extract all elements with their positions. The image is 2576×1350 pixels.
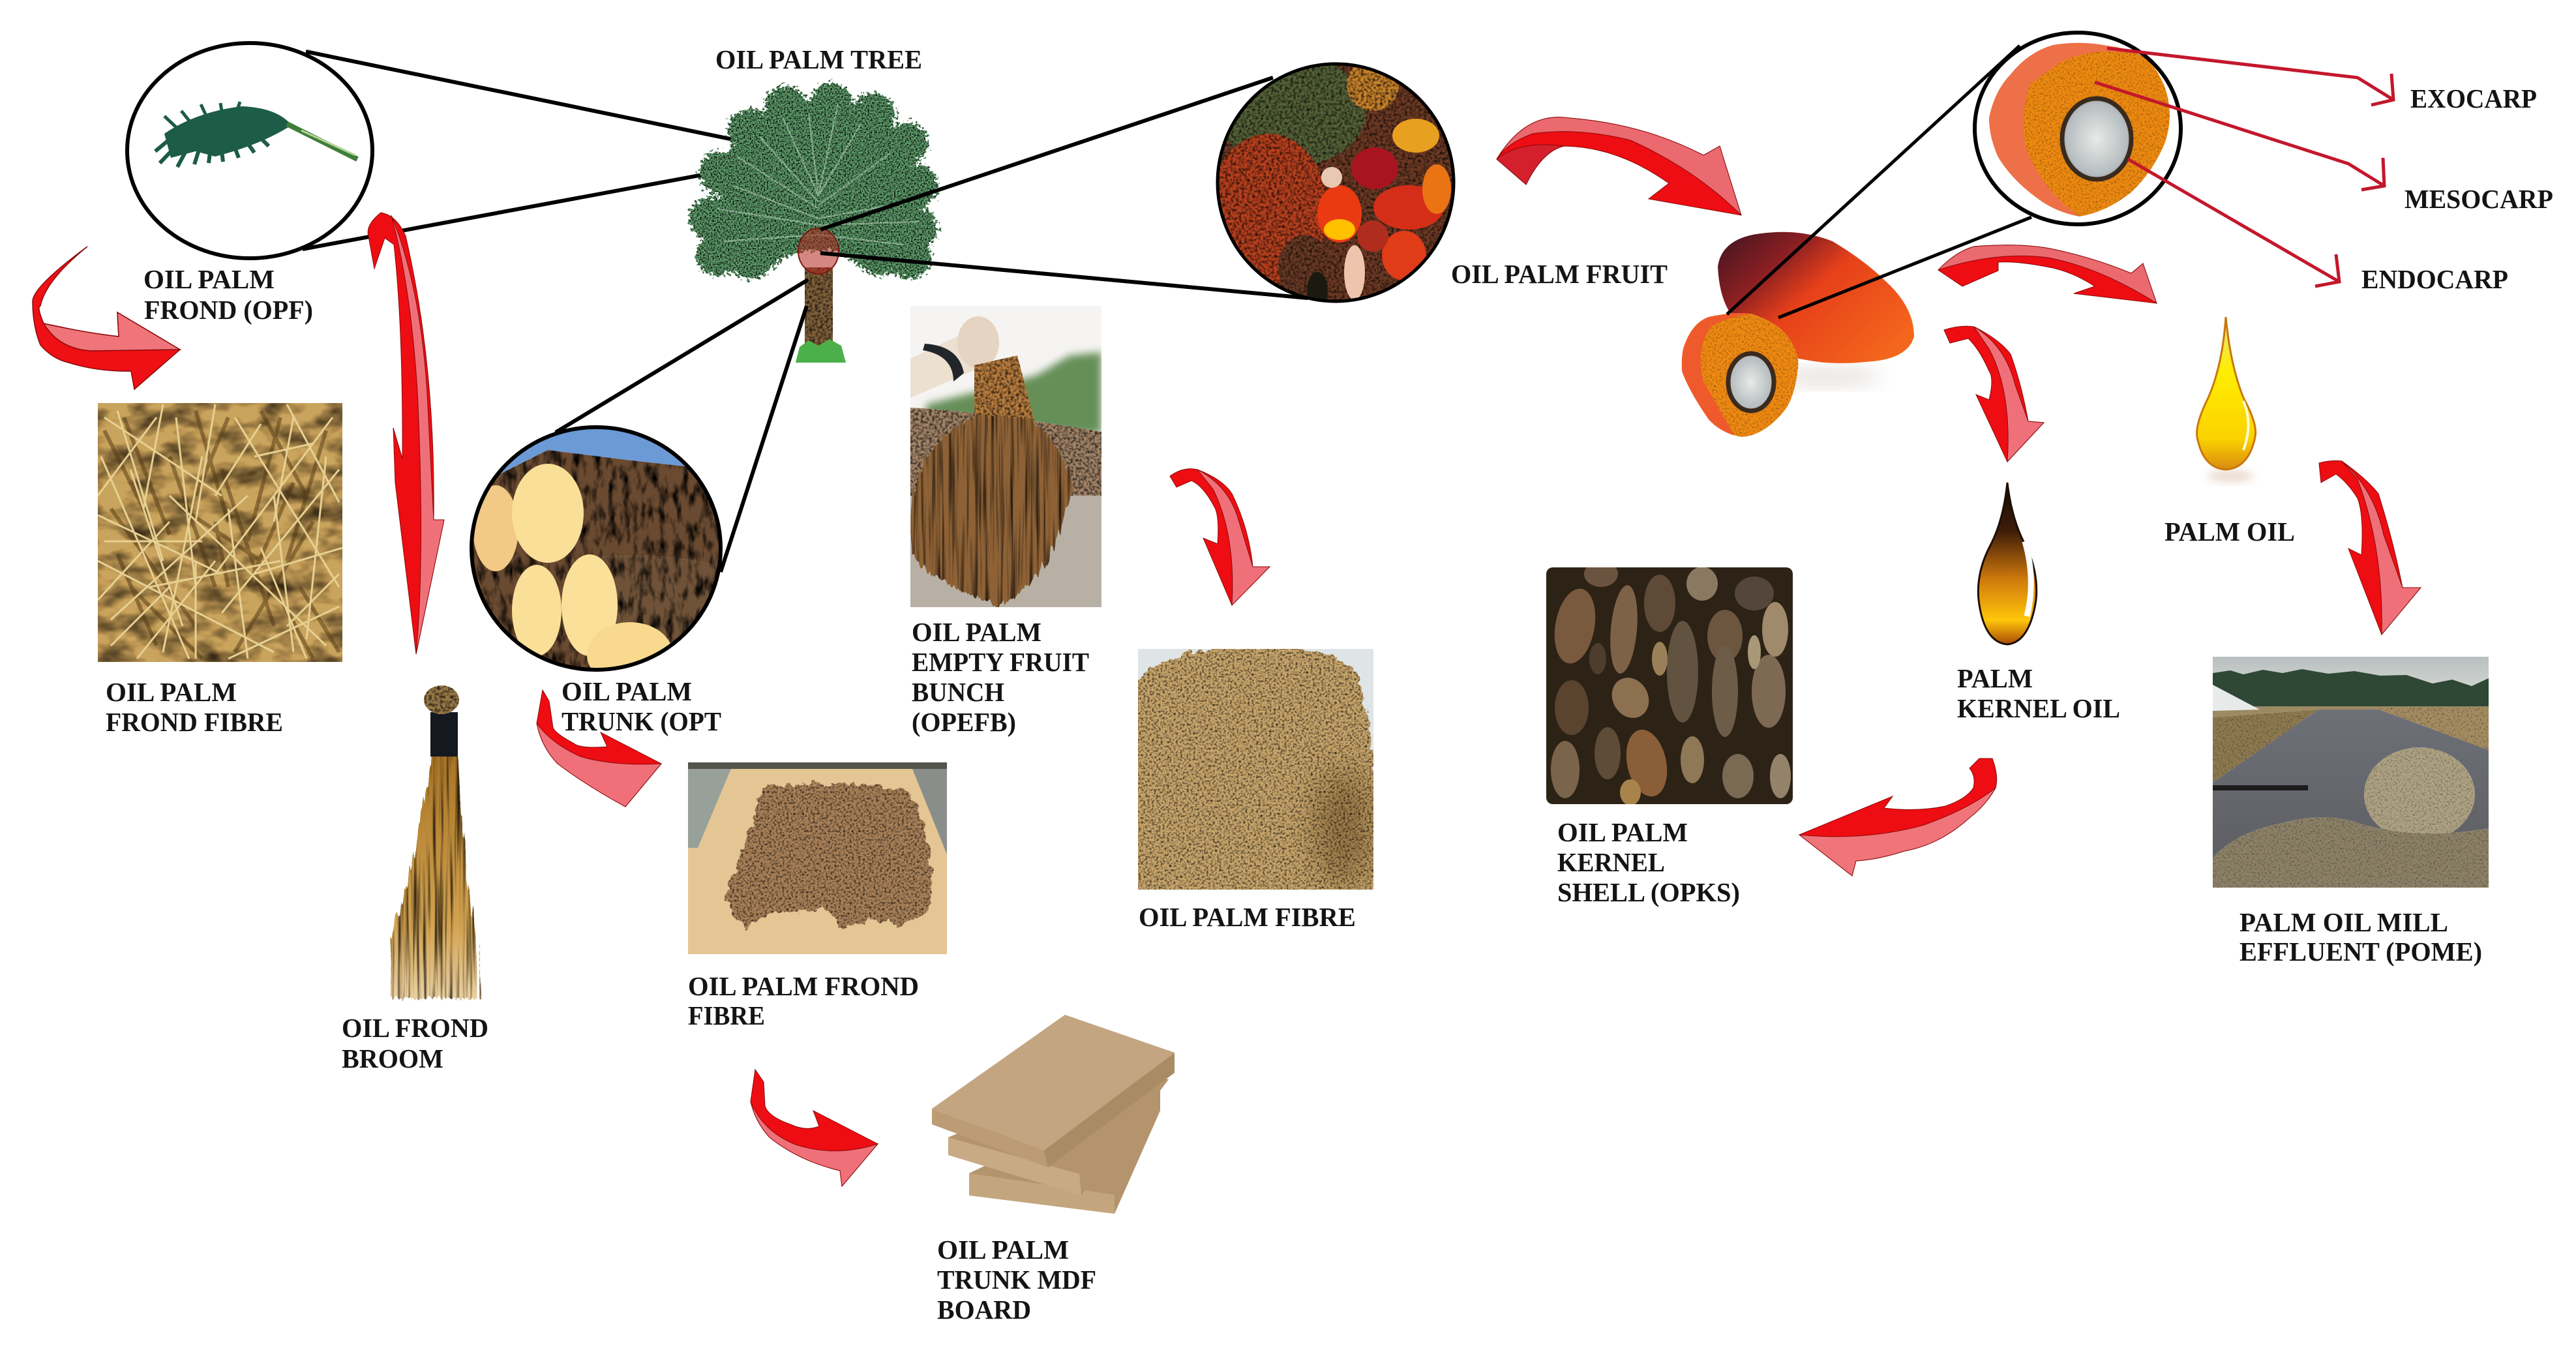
dark strands bbox=[104, 411, 339, 659]
label: frond fibre mat bbox=[688, 971, 919, 1030]
label: palm kernel oil: KERNEL OIL bbox=[1957, 693, 2120, 723]
label: palm oil: PALM OIL bbox=[2164, 517, 2295, 547]
fibre bunch bbox=[910, 415, 1075, 605]
panel: oil palm frond fibre mat photo bbox=[688, 762, 947, 954]
label: oil frond broom: BROOM bbox=[342, 1043, 443, 1073]
stalk bbox=[974, 355, 1037, 430]
arrow: to endocarp bbox=[2128, 159, 2339, 286]
label: exocarp: EXOCARP bbox=[2410, 83, 2537, 113]
arrow: palm oil to effluent bbox=[2319, 460, 2421, 635]
label: frond fibre mat: FIBRE bbox=[688, 1000, 765, 1030]
circle outline bbox=[472, 427, 721, 670]
green trees bbox=[926, 352, 1101, 434]
label: empty fruit bunch: OIL PALM bbox=[912, 617, 1041, 647]
label: oil palm frond fibre bbox=[106, 677, 283, 737]
tree trunk bbox=[805, 267, 833, 347]
base bbox=[2213, 657, 2489, 888]
circle outline bbox=[1975, 33, 2181, 224]
panel: oil palm kernel shell photo bbox=[1546, 561, 1793, 805]
label: empty fruit bunch bbox=[912, 617, 1089, 737]
panel: palm oil mill effluent photo bbox=[2213, 657, 2489, 888]
left bank bbox=[2213, 710, 2318, 783]
icon: palm broom bbox=[390, 685, 479, 999]
label: trunk MDF board: TRUNK MDF bbox=[937, 1265, 1096, 1295]
label: palm kernel oil bbox=[1957, 663, 2120, 723]
drop highlight bbox=[2243, 401, 2249, 450]
hand bbox=[957, 316, 999, 368]
light strands bbox=[98, 404, 342, 659]
far ground bbox=[2213, 706, 2489, 726]
icon: whole and cut palm fruits bbox=[1682, 232, 1914, 437]
dark top edge bbox=[688, 762, 947, 769]
label: empty fruit bunch: BUNCH bbox=[912, 677, 1004, 707]
broom bristles bbox=[390, 753, 479, 999]
label: oil palm frond fibre: FROND FIBRE bbox=[106, 707, 283, 737]
label: trunk MDF board: OIL PALM bbox=[937, 1235, 1069, 1265]
arrow: empty fruit bunch to fibre bbox=[1170, 469, 1270, 605]
label: oil palm frond bbox=[143, 264, 313, 325]
top board bbox=[932, 1015, 1175, 1167]
panel: fruit cross-section circle bbox=[1975, 33, 2181, 224]
icon: palm kernel oil drop bbox=[1978, 483, 2037, 644]
tree grass bbox=[796, 339, 846, 363]
label: kernel shell: OIL PALM bbox=[1557, 817, 1688, 847]
crown highlights bbox=[717, 104, 920, 245]
label: oil palm frond fibre: OIL PALM bbox=[106, 677, 237, 707]
grey floor left bbox=[688, 762, 734, 848]
arrow: to exocarp bbox=[2107, 48, 2393, 105]
bottom board bbox=[969, 1083, 1160, 1214]
right bank bbox=[2374, 708, 2489, 750]
pipe bbox=[2213, 785, 2308, 790]
fruit bunch photo bbox=[1220, 65, 1452, 300]
arrow: fruit to palm kernel oil bbox=[1944, 326, 2044, 462]
connector lines: tree to fruit and trunk bbox=[556, 78, 1308, 572]
kernel oil body bbox=[1978, 483, 2037, 644]
connector lines: frond and trunk callouts bbox=[303, 52, 755, 249]
connector lines: fruit to cross-section bbox=[1727, 46, 2031, 318]
fruit shadow bbox=[1771, 368, 1881, 386]
icon: palm oil drop bbox=[2197, 317, 2256, 483]
watch bbox=[923, 344, 964, 382]
icon: MDF boards bbox=[932, 1015, 1175, 1214]
icon: oil palm tree bbox=[711, 101, 920, 363]
label: trunk MDF board bbox=[937, 1235, 1096, 1325]
label: palm kernel oil: PALM bbox=[1957, 663, 2033, 693]
label: empty fruit bunch: EMPTY FRUIT bbox=[912, 647, 1089, 677]
arrow: frond fibre mat to MDF board bbox=[751, 1070, 878, 1186]
label: empty fruit bunch: (OPEFB) bbox=[912, 707, 1016, 737]
label: frond fibre mat: OIL PALM FROND bbox=[688, 971, 919, 1001]
ground bbox=[910, 496, 1101, 607]
arrow: frond to frond fibre bbox=[33, 247, 180, 389]
board bbox=[688, 762, 947, 954]
title: oil palm tree: OIL PALM TREE bbox=[715, 44, 922, 74]
kernel oil highlight bbox=[2025, 541, 2031, 616]
arrow: fruit to palm oil bbox=[1938, 245, 2157, 303]
trunk photo bbox=[473, 429, 719, 668]
drop body bbox=[2197, 317, 2256, 470]
sky bbox=[2213, 657, 2489, 702]
arrow: fruit bunch to fruit bbox=[1497, 117, 1741, 215]
label: oil palm fruit: OIL PALM FRUIT bbox=[1451, 259, 1668, 289]
arrow: trunk to frond fibre mat bbox=[537, 690, 661, 807]
label: palm oil mill effluent: EFFLUENT (POME) bbox=[2239, 937, 2482, 967]
circle outline bbox=[1218, 64, 1454, 301]
sludge foreground bbox=[2213, 817, 2489, 888]
panel: oil palm frond fibre photo bbox=[98, 403, 342, 662]
label: mesocarp: MESOCARP bbox=[2404, 184, 2553, 214]
arm bbox=[910, 336, 974, 398]
label: kernel shell bbox=[1557, 817, 1740, 907]
label: kernel shell: KERNEL bbox=[1557, 847, 1665, 877]
fibre mound bbox=[724, 783, 931, 929]
panel: oil palm trunk circle bbox=[470, 424, 724, 687]
label: kernel shell: SHELL (OPKS) bbox=[1557, 877, 1740, 907]
straw base bbox=[98, 403, 342, 662]
arrow: frond to broom bbox=[368, 213, 444, 654]
endocarp kernel bbox=[2062, 98, 2131, 179]
label: oil palm frond: FROND (OPF) bbox=[144, 295, 313, 325]
exocarp bbox=[1989, 43, 2133, 217]
sludge patch bbox=[2364, 747, 2475, 841]
fruit highlight circle bbox=[798, 228, 839, 274]
middle board bbox=[948, 1070, 1169, 1195]
label: oil palm frond: OIL PALM bbox=[143, 264, 275, 294]
arrow: palm kernel oil to kernel shell bbox=[1799, 758, 1997, 876]
fibre mass bbox=[1131, 646, 1381, 897]
icon: frond leaf bbox=[155, 102, 357, 167]
label: palm oil mill effluent bbox=[2239, 907, 2482, 967]
background bbox=[910, 306, 1101, 408]
panel: oil palm fruit bunch circle bbox=[1210, 55, 1455, 308]
label: trunk MDF board: BOARD bbox=[937, 1295, 1031, 1325]
label: oil palm trunk: OIL PALM bbox=[562, 676, 692, 706]
drop shadow bbox=[2207, 470, 2254, 483]
panel: oil palm fibre photo bbox=[1131, 646, 1381, 897]
arrow: to mesocarp bbox=[2095, 82, 2384, 190]
label: oil frond broom bbox=[342, 1013, 488, 1073]
shed bbox=[2213, 685, 2260, 711]
label: endocarp: ENDOCARP bbox=[2361, 264, 2508, 294]
label: oil palm fibre: OIL PALM FIBRE bbox=[1139, 902, 1356, 932]
shell pieces bbox=[1549, 561, 1791, 805]
whole palm fruit bbox=[1718, 232, 1914, 363]
broom head bbox=[424, 685, 459, 714]
cut palm fruit bbox=[1682, 313, 1799, 437]
dark base bbox=[1546, 567, 1793, 804]
backdrop bbox=[1138, 649, 1373, 890]
grey floor right bbox=[910, 762, 947, 854]
pond bbox=[2213, 710, 2489, 888]
broom binding bbox=[430, 712, 458, 757]
label: oil palm trunk bbox=[562, 676, 721, 736]
tree crown bbox=[711, 101, 916, 258]
label: palm oil mill effluent: PALM OIL MILL bbox=[2239, 907, 2448, 937]
panel: oil palm frond circle bbox=[127, 43, 372, 258]
mesocarp bbox=[1989, 43, 2170, 217]
tree line bbox=[2213, 669, 2489, 712]
circle outline bbox=[127, 43, 372, 258]
label: oil palm trunk: TRUNK (OPT bbox=[562, 706, 721, 736]
panel: oil palm empty fruit bunch photo bbox=[910, 306, 1101, 607]
label: oil frond broom: OIL FROND bbox=[342, 1013, 488, 1043]
